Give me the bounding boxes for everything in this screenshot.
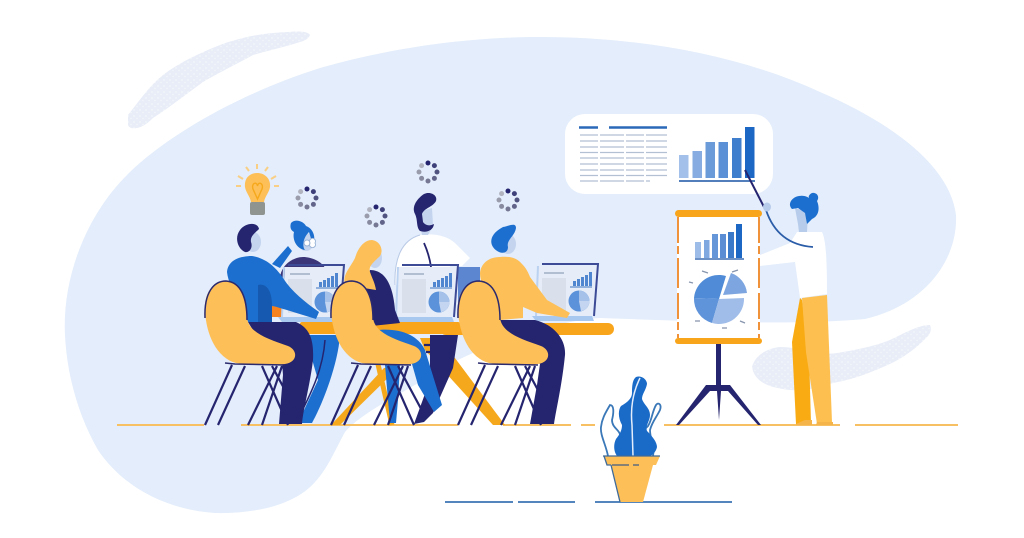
- hair: [491, 225, 516, 253]
- torso and arm: [480, 257, 570, 320]
- icon: light bulb: [236, 164, 279, 215]
- ground line: [117, 424, 958, 426]
- icon: spinner two: [364, 204, 388, 228]
- legs: [248, 322, 313, 424]
- board: [677, 214, 760, 340]
- speckle patch bottom right: [752, 325, 931, 390]
- face: [500, 234, 516, 254]
- icon: spinner four: [496, 188, 520, 212]
- person: blonde woman: [344, 240, 442, 423]
- pointer: [745, 170, 764, 207]
- face: [245, 232, 261, 252]
- plant in pot: [601, 377, 661, 502]
- laptop one: [278, 265, 344, 322]
- leaf vein: [631, 378, 640, 456]
- hand: [763, 202, 771, 212]
- board frame dashes: [678, 217, 759, 338]
- person: blue sweater man: [227, 224, 319, 424]
- side stems: [601, 404, 661, 456]
- hair: [790, 193, 819, 224]
- person: yellow sweater man: [480, 225, 570, 424]
- blue legs: [378, 330, 442, 423]
- orange cup: [271, 305, 282, 317]
- bar chart: [679, 127, 755, 181]
- heading lines: [579, 126, 667, 129]
- floor lines bottom: [445, 501, 732, 503]
- pie chart: [689, 270, 747, 328]
- face: [298, 233, 314, 251]
- face: [795, 208, 808, 232]
- person: bearded man: [395, 193, 480, 424]
- chair one: [205, 281, 300, 425]
- hair: [290, 221, 314, 250]
- stand: [676, 344, 761, 425]
- shirt: [395, 234, 470, 285]
- legs: [792, 298, 811, 424]
- glasses: [304, 238, 316, 248]
- leaf: [614, 377, 657, 456]
- raised arm: [272, 246, 292, 268]
- laptop three: [532, 264, 598, 321]
- laptop two: [392, 265, 458, 322]
- yellow hair: [344, 240, 382, 290]
- table legs: [331, 338, 505, 425]
- icon: spinner three: [416, 160, 440, 184]
- hair: [237, 224, 259, 252]
- feet: [796, 420, 833, 425]
- person: woman with glasses: [272, 221, 325, 280]
- pot: [611, 465, 653, 502]
- mini bar chart: [695, 224, 744, 259]
- hair and beard: [414, 193, 436, 232]
- blue panel behind: [458, 267, 480, 317]
- panel: flip chart: [675, 210, 762, 425]
- dark top: [360, 270, 400, 326]
- torso and arm: [227, 256, 319, 322]
- person: woman with glasses legs: [298, 335, 340, 423]
- dark legs: [414, 335, 458, 424]
- dark shoulders: [280, 257, 325, 280]
- legs: [500, 320, 565, 424]
- torso: [760, 232, 827, 298]
- face: [418, 208, 433, 235]
- chair two: [331, 281, 426, 425]
- panel: projected chart bubble: [565, 114, 773, 194]
- person: presenter: [745, 170, 833, 425]
- chair three: [458, 281, 553, 425]
- tie line: [424, 243, 431, 267]
- background blob: [65, 37, 956, 513]
- raised arm: [766, 210, 813, 247]
- face: [368, 248, 382, 268]
- icon: spinner one: [296, 186, 318, 210]
- speckle patch top left: [128, 31, 310, 128]
- table top: [300, 322, 614, 335]
- text lines: [580, 135, 667, 181]
